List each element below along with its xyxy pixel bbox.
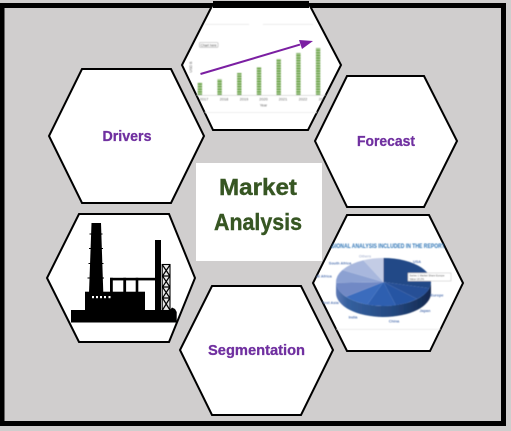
bar chart with trend arrow: 2018 <box>220 98 228 102</box>
bar chart with trend arrow: Year <box>260 104 268 108</box>
hexagon: forecast <box>315 76 457 207</box>
pie chart: regional analysis: Europe <box>430 294 444 298</box>
bar chart with trend arrow: USD B <box>189 61 193 72</box>
heading: Market: Market <box>219 174 297 200</box>
label: Drivers: Drivers <box>102 128 152 145</box>
bar chart with trend arrow: 2020 <box>259 98 268 102</box>
hexagon: drivers <box>49 69 204 203</box>
center panel: Market Analysis <box>196 163 322 261</box>
bar chart with trend arrow: Chart here <box>201 43 217 47</box>
bar chart with trend arrow <box>189 24 329 113</box>
heading: Analysis: Analysis <box>214 209 302 235</box>
pie chart: regional analysis: Series 1 Market Share Europe <box>410 273 445 277</box>
pie chart: regional analysis: REGIONAL ANALYSIS INCLUDED IN THE REPORT: <box>324 244 446 250</box>
pie chart: regional analysis: Japan <box>420 309 431 313</box>
pie chart: regional analysis: USA <box>413 260 421 264</box>
hexagon: segmentation <box>180 286 333 415</box>
hexagon: pie chart <box>313 215 463 351</box>
pie chart: regional analysis: Value 18.2% <box>410 277 425 281</box>
bar chart with trend arrow: 2022 <box>299 98 307 102</box>
pie chart: regional analysis: South Africa <box>329 262 352 266</box>
pie chart: regional analysis: Rest Asia <box>321 301 339 305</box>
pie chart: regional analysis: India <box>349 316 358 320</box>
hexagon: chart <box>182 4 341 130</box>
icon: lattice tower <box>162 264 170 310</box>
icon: factory silhouette <box>71 223 177 322</box>
pie chart: regional analysis: Others <box>359 254 371 258</box>
pie chart: regional analysis: ME Africa <box>314 274 333 278</box>
pie chart: regional analysis: China <box>389 320 400 324</box>
hexagon: factory <box>47 214 195 342</box>
bar chart with trend arrow: 2023 <box>319 98 327 102</box>
bar chart with trend arrow: 2017 <box>200 98 208 102</box>
top bar <box>213 1 309 8</box>
pie chart: regional analysis <box>314 244 451 330</box>
bar chart with trend arrow: 2021 <box>279 98 287 102</box>
label: Forecast: Forecast <box>357 133 415 150</box>
bar chart with trend arrow: 2019 <box>240 98 248 102</box>
label: Segmentation: Segmentation <box>208 342 305 359</box>
